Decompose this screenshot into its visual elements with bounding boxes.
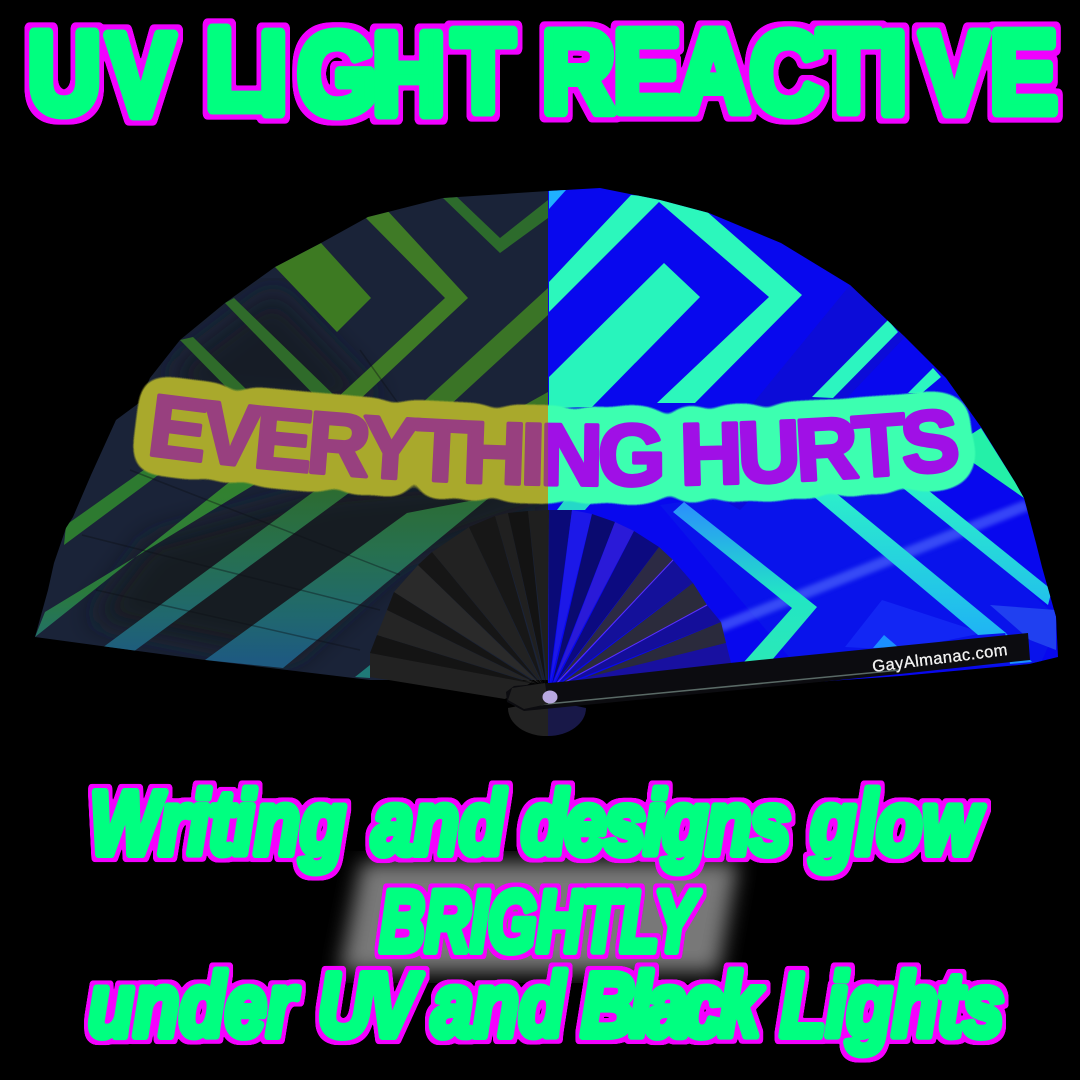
bright outer chevron xyxy=(549,195,802,403)
bright lower stripes xyxy=(673,502,817,662)
bottom caption line 1 xyxy=(90,772,984,874)
dim stripes lower xyxy=(64,467,165,545)
brand text: GayAlmanac.com xyxy=(871,641,1008,676)
rivet xyxy=(542,690,558,704)
bottom caption line 3: under xyxy=(88,954,299,1056)
dim outer chevron xyxy=(337,208,468,402)
bottom knob xyxy=(508,700,586,736)
hand fan xyxy=(35,188,1058,736)
bottom caption line 3: Black xyxy=(581,954,764,1056)
bottom caption line 2: BRIGHTLY xyxy=(380,873,701,969)
bottom caption line 3: UV xyxy=(318,954,423,1056)
bottom caption line 1: Writing xyxy=(90,772,345,874)
bottom caption line 3: and xyxy=(432,954,566,1056)
dim folds xyxy=(82,350,410,650)
bright centre arrow xyxy=(549,263,700,408)
bottom caption line 1: glow xyxy=(809,772,984,874)
dim stripes upper xyxy=(225,298,333,394)
stick with brand text xyxy=(506,633,1030,711)
glow behind BRIGHTLY xyxy=(340,862,738,972)
bright right stripes xyxy=(812,320,898,398)
fan ribs: left half xyxy=(370,510,549,699)
fan ribs: right half xyxy=(549,510,731,688)
dim arrow block xyxy=(275,243,371,332)
dim chevron top xyxy=(443,197,548,253)
bottom caption line 3 xyxy=(88,954,1004,1056)
ghost highlight bands xyxy=(718,500,1030,632)
bottom caption line 1: and xyxy=(372,772,506,874)
fan fabric: bright right half xyxy=(548,180,1080,700)
title: UV LIGHT REACTIVE xyxy=(28,6,1057,141)
fan label left half: EVERYTHING HURTS xyxy=(132,376,548,505)
fan fabric: dim left half xyxy=(0,180,1080,700)
bottom caption line 1: designs xyxy=(521,772,789,874)
fan label right half: EVERYTHING HURTS xyxy=(548,390,976,506)
bright top tip xyxy=(549,190,566,209)
bottom caption line 3: Lights xyxy=(780,954,1004,1056)
